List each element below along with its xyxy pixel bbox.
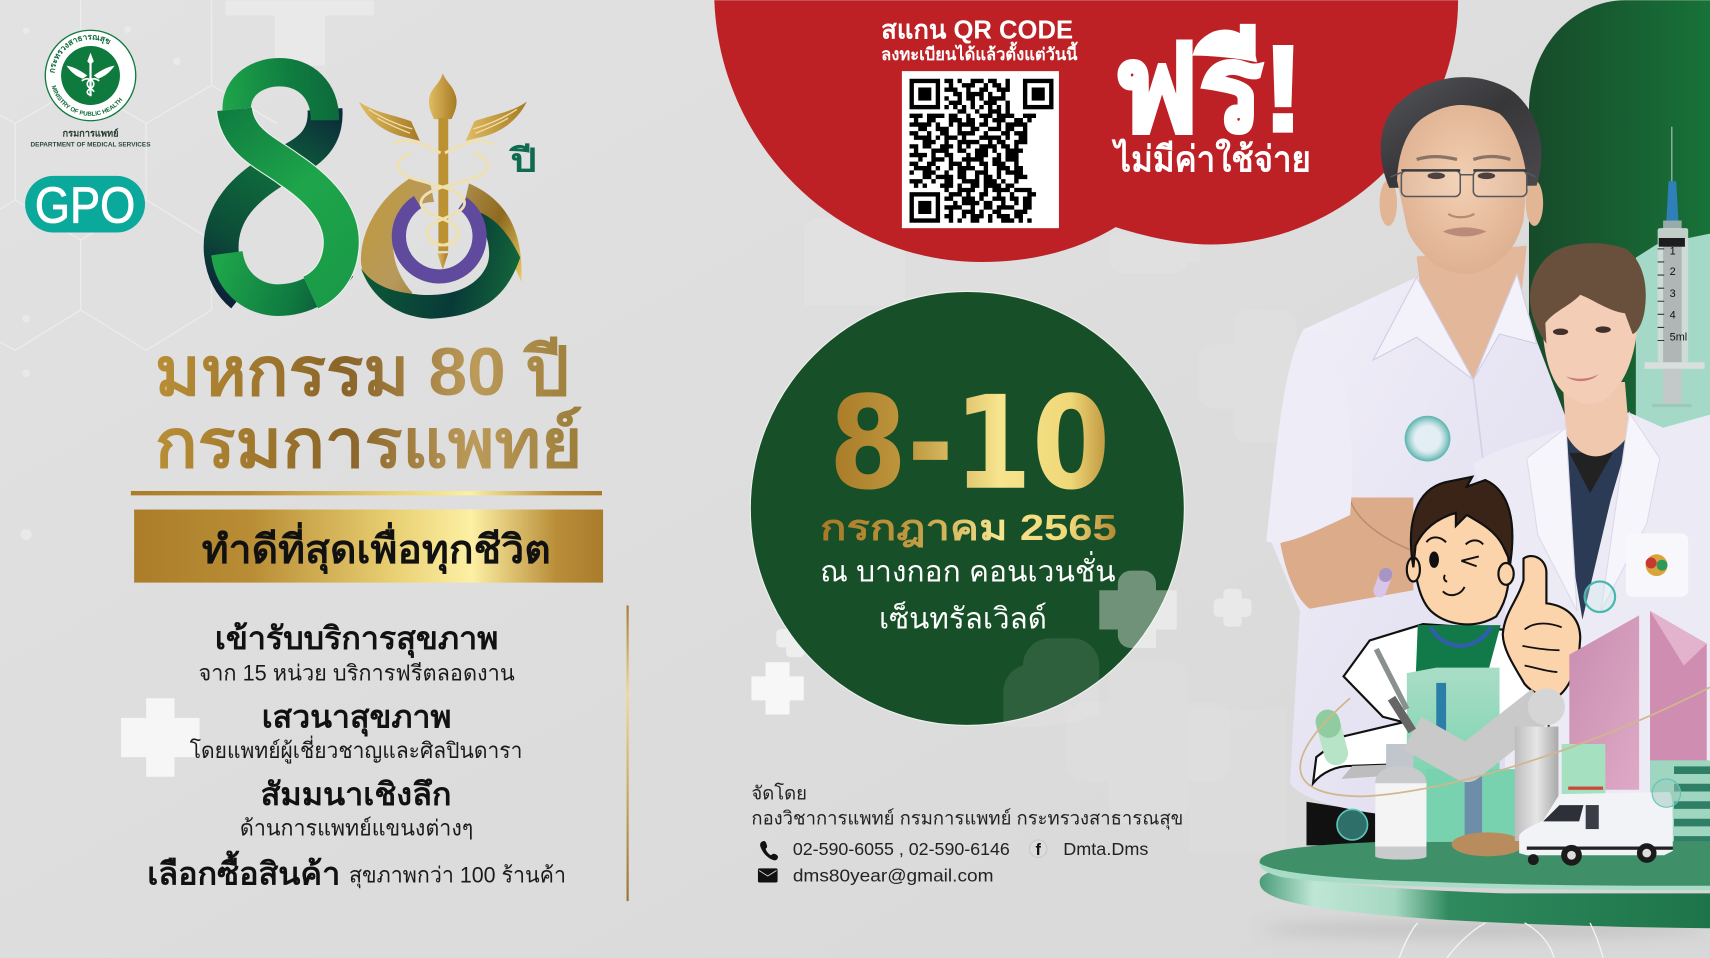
icon: syringe: 1 [1670, 245, 1676, 257]
venue: เซ็นทรัลเวิลด์ [879, 600, 1047, 635]
item: seminar: สัมมนาเชิงลึก [261, 776, 451, 812]
QR subheading: ลงทะเบียนได้แล้วตั้งแต่วันนี้ [881, 41, 1078, 64]
snakes [393, 141, 493, 245]
title [155, 335, 582, 482]
label: years: ปี [509, 141, 537, 178]
plus on circle [1099, 571, 1177, 648]
panel: green backdrop [1529, 0, 1710, 546]
building: pink left [1569, 615, 1639, 790]
digit 0 gold [361, 177, 522, 308]
staff [438, 118, 448, 251]
thumb [1503, 556, 1580, 697]
shirt sleeve [1266, 330, 1352, 543]
no cost text: ไม่มีค่าใช้จ่าย [1111, 137, 1311, 179]
title: กรมการแพทย์ [155, 406, 582, 482]
item: shopping [147, 851, 566, 892]
platform [1260, 841, 1710, 937]
building: pink right [1650, 611, 1707, 790]
placket [1473, 380, 1485, 480]
item: health services: เข้ารับบริการสุขภาพ [215, 620, 498, 658]
faint plus on circle [1003, 638, 1099, 727]
bottle [1375, 744, 1426, 860]
title: มหกรรม 80 ปี [155, 335, 569, 410]
activity list [147, 620, 566, 892]
item: shopping: สุขภาพกว่า 100 ร้านค้า [349, 863, 566, 889]
shirt [1268, 274, 1581, 818]
bubble icons [1337, 779, 1681, 840]
item: health forum: เสวนาสุขภาพ [262, 699, 451, 737]
QR heading: สแกน QR CODE [881, 14, 1073, 44]
item: seminar: ด้านการแพทย์แขนงต่างๆ [240, 816, 473, 841]
caduceus [359, 73, 527, 270]
icon: syringe: 4 [1670, 310, 1676, 322]
venue: ณ บางกอก คอนเวนชั่น [820, 551, 1116, 589]
bubble icon [1405, 416, 1450, 462]
icon: syringe: 5ml [1670, 331, 1687, 343]
cartoon doctor [1313, 477, 1580, 783]
item: health forum [190, 699, 522, 764]
organizer info: dms80year@gmail.com [793, 865, 994, 885]
building: teal block [1426, 769, 1516, 854]
nose and mouth [1448, 214, 1474, 217]
icon: syringe: 3 [1670, 288, 1676, 300]
teal hospital building [1636, 234, 1710, 480]
icon: phone [760, 841, 778, 860]
buildings [1407, 611, 1710, 861]
cape shadow [1341, 764, 1418, 779]
coin stack [1452, 832, 1524, 856]
ears [1407, 558, 1420, 582]
logo: ministry of public health [44, 30, 136, 122]
scrub [1563, 436, 1629, 620]
plus: white centre [751, 662, 804, 715]
organizer info: Dmta.Dms [1063, 839, 1148, 859]
icon: envelope [758, 868, 778, 883]
logo caption [31, 128, 150, 148]
hair [1381, 77, 1541, 188]
coat [1473, 412, 1710, 829]
item: health forum: โดยแพทย์ผู้เชี่ยวชาญและศิลปินดารา [190, 736, 522, 764]
organizer info: กองวิชาการแพทย์ กรมการแพทย์ กระทรวงสาธารณสุข [751, 808, 1183, 831]
logo: GPO: GPO [35, 177, 135, 234]
plus: white left [121, 698, 200, 777]
platform light arcs [1399, 923, 1603, 958]
vertical gold rule [627, 606, 629, 901]
trousers [1306, 802, 1376, 845]
capsule on arm [1371, 566, 1394, 599]
item: seminar [240, 776, 473, 841]
digit 0 green [361, 210, 520, 319]
digit 8 [221, 72, 341, 300]
face [1542, 291, 1638, 404]
brows [1417, 157, 1510, 159]
logo: ministry of public health: MINISTRY OF PUBLIC HEALTH [52, 85, 122, 116]
date number: 8-10 [829, 370, 1110, 519]
item: health services: จาก 15 หน่วย บริการฟรีตลอดงาน [198, 661, 515, 686]
hair [1411, 477, 1512, 567]
shirt [1416, 625, 1501, 682]
icon: facebook [1029, 840, 1047, 859]
panel: date circle [750, 291, 1184, 727]
coat [1313, 624, 1549, 783]
person: female doctor [1473, 243, 1710, 829]
building: green tower [1407, 668, 1500, 854]
date month: กรกฎาคม 2565 [820, 507, 1117, 548]
neck [1417, 246, 1527, 380]
neck [1563, 382, 1629, 456]
person: male doctor [1266, 77, 1581, 845]
face [1397, 105, 1527, 274]
venue [820, 551, 1116, 635]
slogan banner [134, 510, 603, 583]
QR code [902, 71, 1059, 228]
hair [1530, 243, 1646, 344]
collar [1373, 274, 1537, 380]
coat lapel [1527, 412, 1660, 611]
building: striped green [1650, 760, 1710, 861]
building: small green [1562, 744, 1605, 809]
eyes [1428, 173, 1445, 179]
ambulance [1519, 787, 1673, 866]
slogan banner: ทำดีที่สุดเพื่อทุกชีวิต [202, 522, 551, 574]
free heading: ฟรี! [1113, 20, 1303, 157]
wing left [359, 102, 420, 141]
bubble icon [1585, 582, 1615, 612]
glasses [1390, 170, 1536, 197]
icon: facebook: f [1035, 841, 1041, 859]
logo caption: DEPARTMENT OF MEDICAL SERVICES [31, 141, 150, 148]
orbit ring [1300, 687, 1710, 796]
torch flame [429, 73, 457, 119]
logo: 80 years emblem [221, 72, 537, 319]
wing right [466, 102, 527, 141]
organizer info: จัดโดย [751, 783, 807, 804]
gold rule [131, 491, 602, 495]
item: shopping: เลือกซื้อสินค้า [147, 851, 340, 892]
organizer info [751, 783, 1183, 885]
robot arm [1376, 649, 1565, 841]
purple ring [399, 202, 480, 276]
background plus shapes: centre [776, 218, 1331, 851]
background plus: top centre [226, 0, 374, 66]
face [1414, 513, 1509, 624]
icon: syringe [1645, 127, 1705, 407]
background hexagon pattern [0, 0, 277, 540]
capsule [1313, 707, 1351, 768]
logo caption: กรมการแพทย์ [63, 128, 119, 139]
logo: ministry of public health: กระทรวงสาธารณสุข [50, 34, 111, 73]
crossed arm [1280, 498, 1413, 609]
item: health services [198, 620, 515, 686]
coat pocket logo [1626, 534, 1688, 597]
ears [1380, 180, 1397, 226]
icon: syringe: 2 [1670, 266, 1676, 278]
wink eyes [1430, 553, 1438, 567]
organizer info: 02-590-6055 , 02-590-6146 [793, 839, 1010, 859]
eyes and mouth [1553, 329, 1568, 335]
panel: red free registration [714, 0, 1458, 262]
